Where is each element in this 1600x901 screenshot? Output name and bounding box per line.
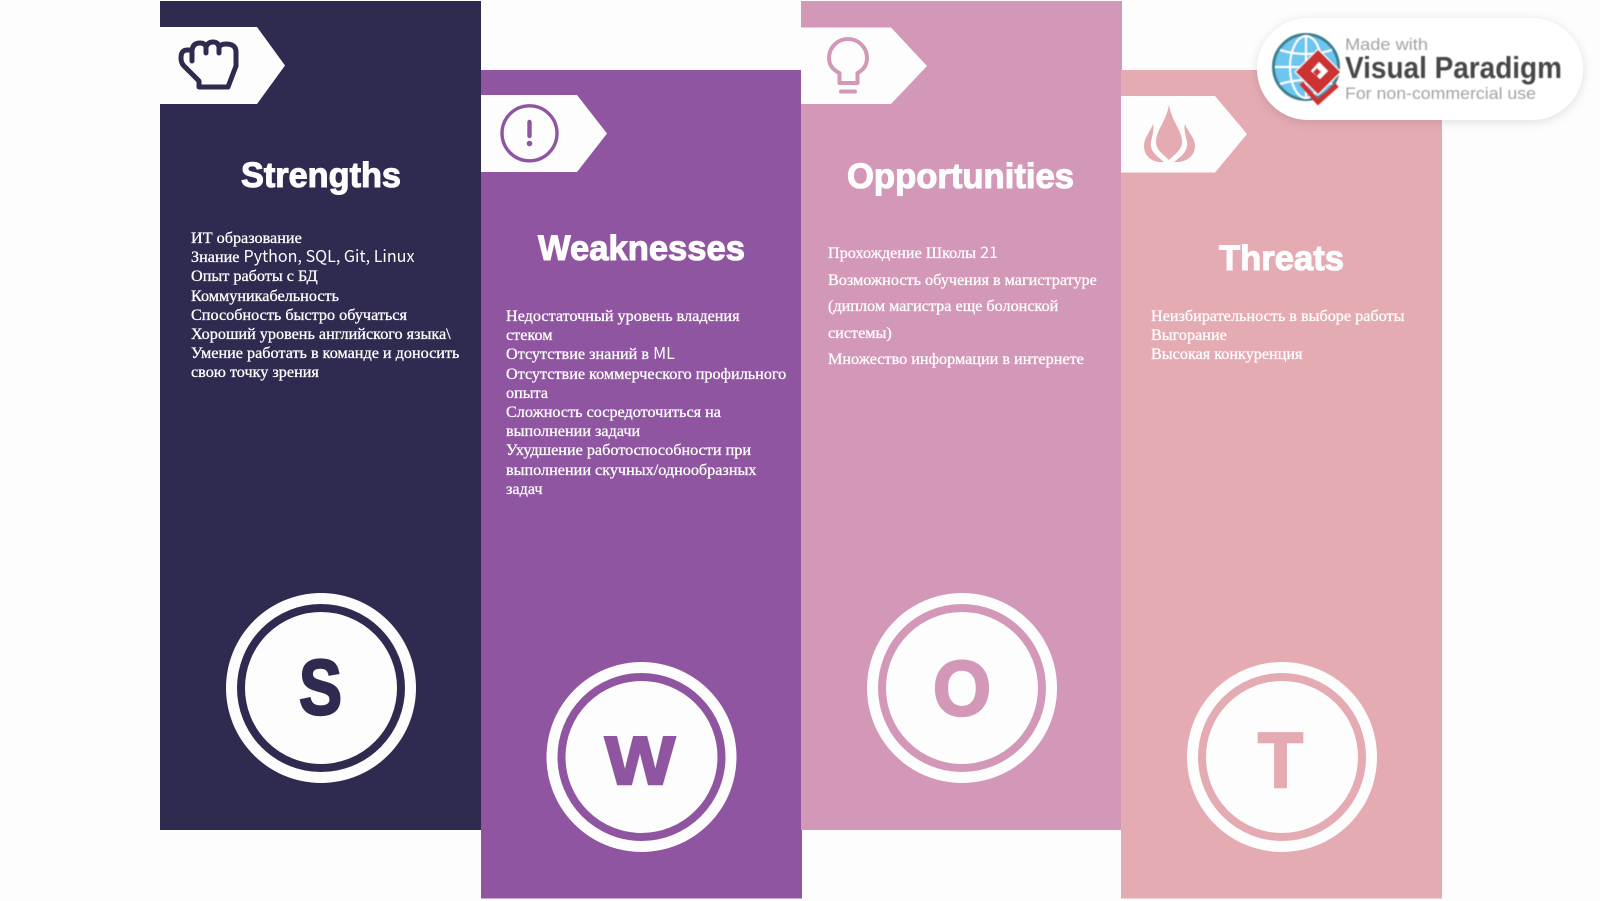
text block: threats list [1151,307,1405,363]
text block: strengths list: свою точку зрения [191,363,319,381]
badge: W [546,662,736,852]
panel: strengths [160,1,481,830]
icon: fist [181,42,236,87]
text block: opportunities list: Прохождение Школы 21 [828,239,998,263]
heading: Threats: Threats [1219,239,1344,278]
logo text: Made with [1345,35,1428,54]
text block: strengths list: Способность быстро обучаться [191,306,407,324]
text block: strengths list: ИТ образование [191,229,302,247]
text block: weaknesses list: задач [506,480,542,498]
tag with bulb icon [801,28,927,104]
text block: opportunities list: системы) [828,324,892,342]
text block: strengths list: Опыт работы с БД [191,267,318,285]
text block: weaknesses list: Отсутствие знаний в ML [506,340,675,364]
badge: T: T [1258,716,1303,804]
text block: opportunities list: (диплом магистра еще болонской [828,297,1059,315]
text block: weaknesses list: Сложность сосредоточиться на [506,403,721,421]
text block: weaknesses list: стеком [506,326,553,344]
panel: weaknesses [481,70,802,898]
text block: weaknesses list: выполнении скучных/однообразных [506,461,756,479]
text block: strengths list: Умение работать в команде и доносить [191,344,459,362]
text block: opportunities list: Множество информации в интернете [828,350,1084,368]
tag with flame icon [1121,96,1247,172]
text block: threats list: Неизбирательность в выборе работы [1151,307,1405,325]
badge: S: S [299,643,342,731]
text block: strengths list [191,229,459,381]
icon: flame [1144,105,1195,162]
text block: strengths list: Коммуникабельность [191,287,339,305]
badge: O [867,593,1057,783]
badge: S [226,593,416,783]
heading: Opportunities: Opportunities [847,157,1074,196]
tag with fist icon [160,27,285,104]
text block: weaknesses list: Ухудшение работоспособности при [506,441,751,459]
tag with alert icon [481,95,607,172]
text block: opportunities list [828,239,1097,368]
text block: threats list: Высокая конкуренция [1151,345,1303,363]
text block: weaknesses list: выполнении задачи [506,422,641,440]
heading: Weaknesses: Weaknesses [538,229,745,268]
icon: exclamation circle [502,106,557,161]
text block: opportunities list: Возможность обучения в магистратуре [828,271,1097,289]
text block: weaknesses list [506,307,786,498]
badge: W: W [605,723,676,799]
watermark badge: Visual Paradigm [1257,18,1583,120]
icon: light bulb [829,39,867,92]
logo text: For non-commercial use [1345,84,1536,103]
logo text [1345,35,1562,103]
text block: weaknesses list: Отсутствие коммерческого профильного [506,365,786,383]
panel: threats [1121,70,1442,898]
text block: strengths list: Хороший уровень английского языка\ [191,325,451,343]
logo: globe and diamond [1274,34,1341,102]
text block: weaknesses list: опыта [506,384,548,402]
text block: strengths list: Знание Python, SQL, Git, Linux [191,243,414,267]
badge: O: O [933,644,991,732]
text block: weaknesses list: Недостаточный уровень владения [506,307,740,325]
text block: threats list: Выгорание [1151,326,1227,344]
heading: Strengths: Strengths [241,156,401,195]
badge: T [1187,662,1377,852]
panel: opportunities [801,1,1122,830]
logo text: Visual Paradigm [1345,50,1562,85]
